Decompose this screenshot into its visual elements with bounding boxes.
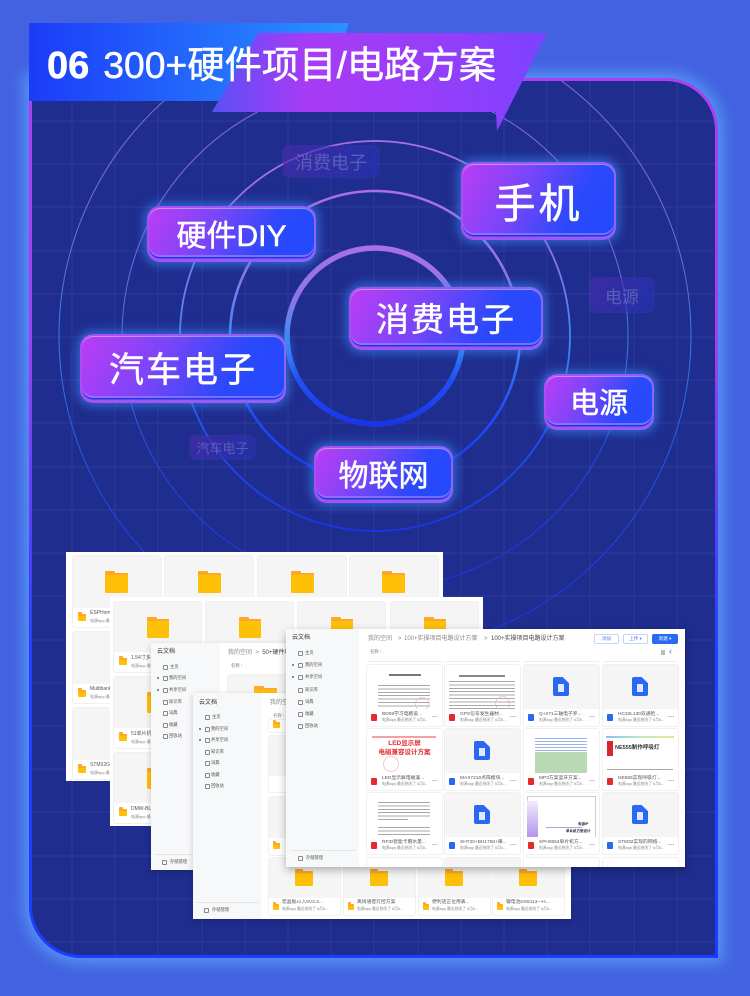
screenshot 3: app window with sidebar: 知识库: [169, 699, 182, 704]
tag: 物联网: [314, 446, 453, 503]
file card: row 1 col 3: 电源app 最近修改了 6月6...: [539, 718, 585, 722]
file card: row 1 col 2: [445, 665, 520, 726]
screenshot 3: app window with sidebar: 回收站: [169, 733, 182, 738]
file card: row 2 col 3: [524, 729, 599, 790]
tag: 电源: [544, 374, 654, 430]
screenshot 3: app window with sidebar: 我的空间 > 50+硬件项目: [228, 650, 296, 656]
file card: row 3 col 2: 电源app 最近修改了 6月6...: [460, 846, 506, 850]
file card: row 2 col 1: LED显示屏: [388, 740, 421, 747]
screenshot 4: app window with folders: 词典: [211, 760, 220, 765]
tag: 电源: 电源: [570, 388, 628, 420]
file card: row 1 col 2: GPS信号发生器材...: [460, 712, 503, 716]
sidebar: 收藏: [305, 711, 314, 716]
file card: row 3 col 4: [603, 793, 678, 854]
ghost tag: 电源: [590, 278, 654, 312]
file card: row 3 col 3: 单片机方案设计: [566, 829, 590, 833]
file card: row 2 col 1: 电源app 最近修改了 6月6...: [382, 782, 428, 786]
screenshot 4: app window with folders: 共享空间: [211, 737, 228, 742]
ghost tag: 电源: 电源: [605, 288, 639, 306]
tag: 硬件DIY: [147, 206, 316, 262]
file card: row 3 col 4: STM32实现的网络...: [618, 840, 661, 844]
file card: row 1 col 1: 电源app 最近修改了 6月6...: [382, 718, 428, 722]
file card: row 3 col 4: 电源app 最近修改了 6月6...: [618, 846, 664, 850]
tag: 硬件DIY: 硬件DIY: [176, 220, 286, 252]
sidebar: [286, 629, 359, 867]
screenshot 4: app window with folders: 电源app 最近修改了 6月6...: [357, 907, 403, 911]
file card: row 3 col 3: 电源IP: [578, 822, 588, 826]
screenshot 3: app window with sidebar: 存储管理: [170, 859, 187, 864]
toolbar buttons: [594, 634, 678, 644]
screenshot 4: app window with folders: 收藏: [211, 772, 220, 777]
ghost tag: 消费电子: 消费电子: [295, 152, 367, 172]
title banner: [29, 23, 547, 131]
file card: row 2 col 2: MAX7219点阵模块...: [460, 776, 504, 780]
file card: row 2 col 4: 电源app 最近修改了 6月6...: [618, 782, 664, 786]
file card: row 2 col 4: NE555实现呼吸灯...: [618, 776, 661, 780]
screenshot 2: folder grid: 51单片机: [131, 731, 152, 737]
ghost tag: 汽车电子: [190, 436, 255, 459]
breadcrumb: [368, 634, 565, 642]
file card: row 3 col 2: [445, 793, 520, 854]
screenshot 4: app window with folders: 电源app 最近修改了 6月6...: [282, 907, 328, 911]
screenshot 4: app window with folders: 名称 ↑: [273, 713, 285, 718]
tag: 手机: [461, 162, 616, 240]
screenshot 4: app window with folders: 离线语音灯控方案: [357, 900, 395, 905]
file card: row 2 col 2: 电源app 最近修改了 6月6...: [460, 782, 506, 786]
screenshot 2: folder grid: 电源app 最: [131, 663, 151, 668]
tag: 汽车电子: [80, 334, 286, 403]
breadcrumb: >: [398, 636, 402, 642]
file card: row 2 col 3: MP3方案蓝牙方案...: [539, 776, 582, 780]
breadcrumb: 100+实操项目电路设计方案: [491, 636, 565, 642]
title text: 06 300+硬件项目/电路方案: [47, 44, 496, 87]
screenshot 2: folder grid: 电源app 最: [131, 814, 151, 819]
screenshot 4: app window with folders: 云文档: [199, 700, 217, 706]
breadcrumb: 100+实操项目电路设计方案: [404, 636, 478, 642]
toolbar buttons: 新建 ▾: [659, 636, 671, 641]
screenshot 4: app window with folders: 我的空间: [211, 726, 228, 731]
screenshot 5: document grid window: [286, 629, 685, 867]
file card: row 1 col 1: [367, 665, 442, 726]
file card: row 1 col 2: 电源app 最近修改了 6月6...: [460, 718, 506, 722]
sidebar: 我的空间: [305, 662, 322, 667]
screenshot 2: folder grid: DMW-BLE: [131, 806, 155, 812]
screenshot 4: app window with folders: 镍电池DS5113—H...: [506, 900, 550, 905]
screenshot 2: folder grid: 电源app 最: [131, 739, 151, 744]
screenshot 3: app window with sidebar: 云文档: [157, 649, 175, 655]
file card: row 2 col 2: [445, 729, 520, 790]
tag: 消费电子: 消费电子: [376, 301, 516, 338]
sidebar: 主页: [305, 650, 314, 655]
sidebar: 共享空间: [305, 674, 322, 679]
screenshot 3: app window with sidebar: 我的空间: [169, 675, 186, 680]
file card: row 3 col 1: [367, 793, 442, 854]
screenshot 4: app window with folders: 便利店正位用表...: [432, 900, 470, 905]
sidebar: 云文档: [292, 635, 310, 641]
screenshot 1: folder grid: 电源app 最: [90, 770, 110, 775]
screenshot 4: app window with folders: [193, 693, 571, 919]
screenshot 4: app window with folders: 存储管理: [212, 907, 229, 912]
screenshot 3: app window with sidebar: 名称 ↑: [231, 663, 243, 668]
toolbar buttons: 上传 ▾: [629, 636, 642, 641]
file card: row 2 col 1: [367, 729, 442, 790]
file card: row 3 col 3: [524, 793, 599, 854]
file card: row 2 col 1: LED显示屏电磁兼...: [382, 776, 424, 780]
screenshot 1: folder grid: ESPHome: [90, 610, 113, 616]
screenshot 4: app window with folders: 主页: [212, 714, 221, 719]
file card: row 1 col 3: Q+271三轴电子罗...: [539, 712, 582, 716]
screenshot 4: app window with folders: 知识库: [211, 749, 224, 754]
breadcrumb: 我的空间: [368, 636, 392, 642]
tag: 物联网: 物联网: [338, 460, 428, 493]
screenshot 5: document grid window: 名称 ↑: [370, 649, 382, 654]
file card: row 2 col 4: NE555制作呼吸灯: [615, 745, 659, 751]
sidebar: 存储管理: [306, 855, 323, 860]
file card: row 1 col 4: [603, 665, 678, 726]
tag: 汽车电子: 汽车电子: [109, 350, 257, 390]
file card: row 3 col 1: 电源app 最近修改了 6月6...: [382, 846, 428, 850]
file card: row 3 col 2: SHT20+BH1750+串...: [460, 840, 507, 844]
screenshot 4: app window with folders: 电源app 最近修改了 6月6...: [506, 907, 552, 911]
file card: row 2 col 3: 电源app 最近修改了 6月6...: [539, 782, 585, 786]
screenshot 3: app window with sidebar: 词典: [169, 710, 178, 715]
screenshot 3: app window with sidebar: 收藏: [169, 722, 178, 727]
sidebar: 回收站: [305, 723, 318, 728]
tag: 手机: 手机: [494, 180, 582, 226]
toolbar buttons: 添加: [602, 636, 611, 641]
sidebar: 词典: [305, 699, 314, 704]
screenshot 2: folder grid: 1.54寸多: [131, 655, 151, 661]
screenshot 4: app window with folders: 电源app 最近修改了 6月6...: [432, 907, 478, 911]
file card: row 2 col 1: 电磁兼容设计方案: [378, 749, 430, 756]
file card: row 3 col 1: RFID智能卡腕水量...: [382, 840, 426, 844]
screenshot 4: app window with folders: 我的空间: [270, 700, 294, 706]
sidebar: 知识库: [305, 687, 318, 692]
screenshot 1: folder grid: [66, 552, 443, 781]
banner shapes: [29, 23, 547, 131]
breadcrumb: >: [484, 636, 488, 642]
screenshot 1: folder grid: 电源app 最: [90, 618, 110, 623]
tag: 消费电子: [349, 287, 543, 350]
screenshot 4: app window with folders: 回收站: [211, 783, 224, 788]
file card: row 2 col 4: [603, 729, 678, 790]
file card: row 1 col 1: BD09学习电路设...: [382, 712, 422, 716]
screenshot 2: folder grid: [110, 597, 483, 826]
ghost tag: 消费电子: [283, 146, 379, 177]
screenshot 1: folder grid: 电源app 最: [90, 694, 110, 699]
file card: row 1 col 3: [524, 665, 599, 726]
screenshot 3: app window with sidebar: [151, 643, 451, 870]
file card: row 3 col 3: SPH0654单片机方...: [539, 840, 583, 844]
chart: grid and concentric rings: [32, 81, 715, 955]
file card: row 1 col 4: 电源app 最近修改了 6月6...: [618, 718, 664, 722]
screenshot 1: folder grid: STM32G0: [90, 762, 113, 768]
ghost tag: 汽车电子: 汽车电子: [196, 441, 248, 456]
screenshot 1: folder grid: Multibank: [90, 686, 111, 692]
screenshot 5: document grid window: ‹: [669, 646, 672, 656]
file card: row 1 col 4: HC32L130双通检...: [618, 712, 659, 716]
screenshot 3: app window with sidebar: 主页: [170, 664, 179, 669]
screenshot 4: app window with folders: 宏晶板x1入5V3.3...: [282, 900, 323, 905]
screenshot 3: app window with sidebar: 共享空间: [169, 687, 186, 692]
file card: row 3 col 3: 电源app 最近修改了 6月6...: [539, 846, 585, 850]
